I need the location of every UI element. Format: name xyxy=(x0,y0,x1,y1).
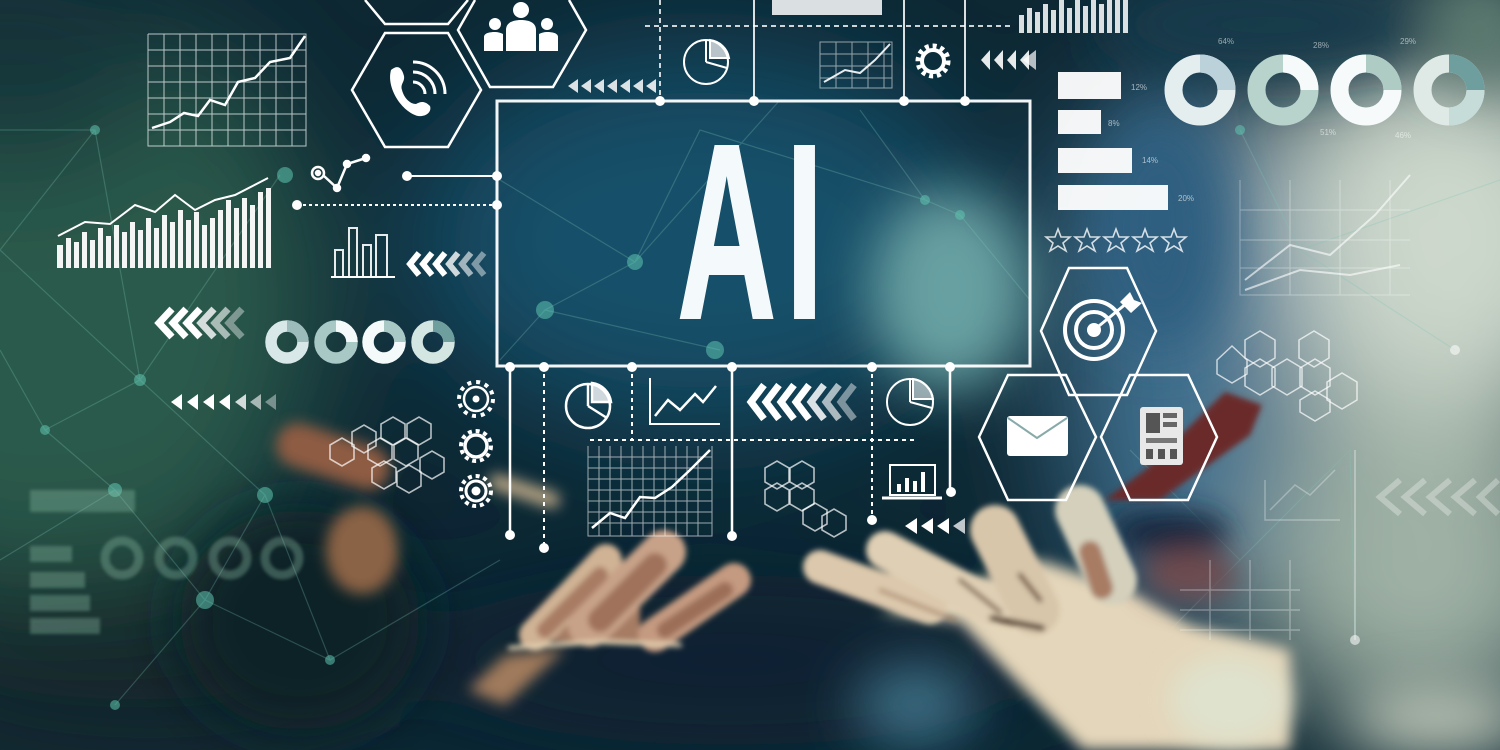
icon: gear top xyxy=(918,46,948,76)
faded right panel graph xyxy=(1240,175,1410,295)
bar labels: 8% xyxy=(1108,119,1120,128)
icon: hexagon top fragment xyxy=(365,0,468,24)
honeycomb centre xyxy=(765,461,846,537)
chart: lower grid line chart xyxy=(588,446,712,536)
chart: top bar fragments xyxy=(772,0,1128,33)
left hand: near fingers xyxy=(510,552,734,648)
arrows: top centre xyxy=(568,79,656,93)
icon: small line plot xyxy=(312,155,369,191)
icon: hexagon people xyxy=(458,0,586,87)
arrows: left chevrons upper xyxy=(410,253,484,275)
right hand fingers xyxy=(820,510,1112,628)
arrows: top right xyxy=(981,50,1036,70)
right hand palm xyxy=(880,560,1290,750)
bar labels: 20% xyxy=(1178,194,1194,203)
phone in hand xyxy=(1105,392,1262,500)
network nodes xyxy=(40,125,1460,710)
right hand shadow xyxy=(1110,510,1238,601)
icon: hexagon mail xyxy=(979,375,1096,500)
donut labels: 29% xyxy=(1400,37,1416,46)
donut labels xyxy=(1218,37,1416,140)
faded lower left widgets xyxy=(30,490,299,634)
main AI frame with connectors xyxy=(297,0,1030,548)
chart: small bars xyxy=(331,228,395,277)
chart: lower line frame xyxy=(650,378,720,424)
title: AI: I xyxy=(785,91,824,371)
arrows: left triangles xyxy=(171,394,276,410)
connector nodes xyxy=(292,96,970,553)
rings: left donuts xyxy=(271,326,449,358)
left hand: wrist xyxy=(468,648,566,705)
honeycomb left xyxy=(330,417,444,493)
bar labels xyxy=(1108,83,1194,203)
chart: left bar and line chart xyxy=(57,178,271,268)
donut labels: 64% xyxy=(1218,37,1234,46)
faded lower right chart xyxy=(1180,450,1498,640)
icon: pie lower right xyxy=(887,379,933,425)
chart: top small grid xyxy=(820,42,892,88)
right hand lower wash xyxy=(1170,655,1290,745)
icon: pie top xyxy=(684,40,729,84)
arrows: lower triangles xyxy=(905,518,965,534)
title: AI: A xyxy=(677,91,776,371)
icon: hexagon target xyxy=(1041,268,1156,395)
donut labels: 28% xyxy=(1313,41,1329,50)
icon: pie lower left xyxy=(566,383,611,428)
icon: hexagon tablet xyxy=(1101,375,1217,500)
icon: hexagon phone xyxy=(352,33,481,147)
horizontal bar chart: top right xyxy=(1058,72,1168,210)
donut labels: 51% xyxy=(1320,128,1336,137)
donut charts: top right xyxy=(1174,64,1476,116)
arrows: left chevrons middle xyxy=(159,309,242,337)
bar labels: 14% xyxy=(1142,156,1158,165)
icon: laptop chart xyxy=(882,465,942,498)
bar labels: 12% xyxy=(1131,83,1147,92)
rating stars xyxy=(1046,229,1186,251)
chart: top-left grid line chart xyxy=(148,34,306,146)
left hand: far blurred fingers xyxy=(298,445,552,594)
hands xyxy=(298,392,1290,750)
donut labels: 46% xyxy=(1395,131,1411,140)
icon: gears column xyxy=(459,382,493,506)
arrows: centre chevrons xyxy=(751,385,854,419)
honeycomb right xyxy=(1217,331,1357,421)
